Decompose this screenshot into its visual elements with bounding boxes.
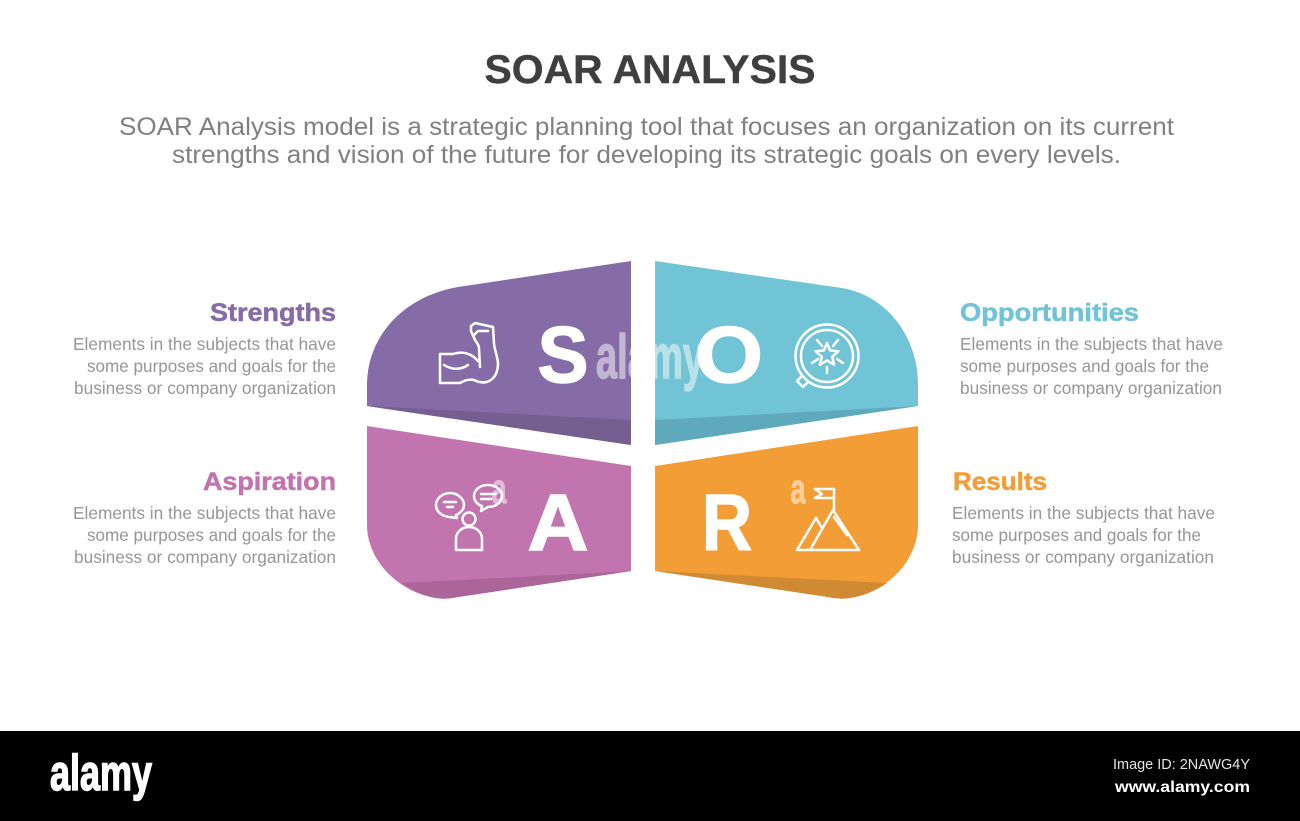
icon: mountain flag [797,489,859,550]
text block: opportunities: business or company organization [960,378,1222,398]
watermark a: a [790,465,806,512]
image id: Image ID: 2NAWG4Y [1113,756,1250,773]
icon: flexed arm [440,323,498,383]
text block: results: business or company organization [952,547,1214,567]
text block: aspiration [73,468,336,567]
text block: results [952,468,1215,567]
footer logo: alamy [50,745,152,801]
text block: strengths: some purposes and goals for the [87,356,336,376]
text block: results: some purposes and goals for the [952,525,1201,545]
text block: strengths: business or company organization [74,378,336,398]
letter O: O [695,310,763,399]
text block: opportunities: Opportunities [960,299,1139,327]
letter R: R [702,478,752,567]
icon: person with speech bubbles [436,485,502,550]
subtitle: strengths and vision of the future for developing its strategic goals on every levels. [172,141,1121,169]
text block: aspiration: some purposes and goals for the [87,525,336,545]
text block: results: Results [953,468,1047,496]
text block: opportunities: Elements in the subjects that have [960,334,1223,354]
panel: opportunities segment [596,261,918,445]
text block: results: Elements in the subjects that have [952,503,1215,523]
title: SOAR ANALYSIS [484,48,816,92]
watermark: alamy: alamy [596,323,704,392]
watermark a: a [492,465,507,512]
text block: strengths: Elements in the subjects that have [73,334,336,354]
letter S: S [538,310,588,399]
text block: opportunities [960,299,1223,398]
letter A: A [528,478,588,567]
subtitle [119,113,1174,169]
text block: aspiration: business or company organization [74,547,336,567]
icon: star badge [796,324,858,388]
text block: aspiration: Elements in the subjects that have [73,503,336,523]
panel: strengths segment [367,261,631,445]
text block: opportunities: some purposes and goals for the [960,356,1209,376]
text block: strengths [73,299,336,398]
panel: results segment [655,426,918,599]
subtitle: SOAR Analysis model is a strategic planning tool that focuses an organization on its current [119,113,1174,141]
footer bar [0,731,1300,821]
panel: aspiration segment [367,426,631,599]
text block: aspiration: Aspiration [203,468,336,496]
website: www.alamy.com [1114,779,1250,796]
text block: strengths: Strengths [210,299,336,327]
